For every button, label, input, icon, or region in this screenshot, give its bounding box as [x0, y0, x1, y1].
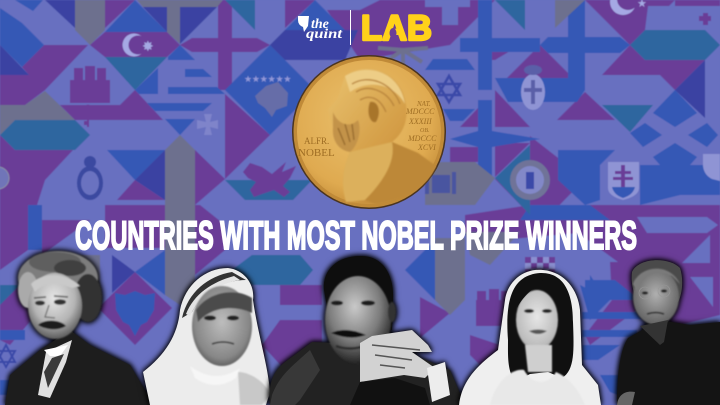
flag shapes: slate grey	[0, 0, 585, 315]
icon: Kosovo map and stars: ★★★★★★	[244, 75, 291, 85]
medal: inscription right: MDCCC	[405, 107, 435, 116]
stripes: Greek flag lower	[582, 280, 642, 395]
portrait: Malala Yousafzai	[459, 270, 601, 405]
periwinkle panels upper right	[425, 0, 718, 307]
medal: inscription right: XXXIII	[408, 117, 432, 126]
logo: The Quint: the	[311, 17, 329, 32]
icon: Albanian eagle	[115, 291, 155, 336]
icon: crescent and star: ✸	[142, 39, 154, 55]
icon: small Star of David lower left	[0, 345, 15, 367]
flag shapes: indigo	[0, 0, 705, 293]
icon: Serbia crest	[521, 65, 545, 110]
medal: Nobel gold medal	[292, 55, 446, 209]
icon: Croatian checker	[525, 257, 555, 275]
portrait: Albert Einstein	[5, 251, 150, 405]
icon: small purple cross	[699, 13, 711, 25]
icon: Kosovo map and stars	[244, 75, 291, 117]
portrait: Kazuo Ishiguro	[617, 260, 720, 405]
icon: Slovakia shield	[608, 162, 639, 200]
icon: Turkey crescent	[610, 0, 647, 15]
logo: LAB: LAB	[361, 9, 432, 48]
medal: Alfred Nobel relief	[328, 69, 436, 204]
medal: inscription right: XCVI	[417, 143, 436, 152]
icon: San Marino crest	[77, 156, 103, 200]
icon: Slovenia shield	[703, 154, 720, 181]
logo: The Quint	[298, 10, 351, 45]
icon: Georgia crosses	[293, 290, 305, 339]
portrait: Martin Luther King Jr.	[270, 256, 462, 405]
medal: inscription left: ALFR.	[304, 136, 329, 146]
icon: Welsh dragon	[243, 162, 296, 197]
medal: inscription left	[298, 136, 335, 159]
medal: inscription right: NAT.	[416, 100, 431, 108]
icon: second Gibraltar castle	[476, 289, 510, 326]
portrait: MLK hands and cuff	[350, 330, 450, 405]
medal: inscription right	[405, 100, 437, 152]
logo: The Quint: quint	[306, 27, 343, 42]
medal: inscription right: OB.	[420, 128, 430, 134]
icon: Malta cross	[197, 114, 218, 135]
flag shapes: teal	[0, 0, 720, 305]
icon: globe lower left edge	[0, 167, 9, 189]
Philippines-style grey rays	[378, 48, 428, 65]
medal: inscription right: MDCCC	[407, 134, 437, 143]
icon: crescent and star	[122, 34, 154, 56]
portrait: Mother Teresa	[143, 268, 270, 405]
icon: Gibraltar castle with key	[70, 66, 110, 127]
icon: Portugal crest	[510, 160, 550, 200]
icon: Spain crest	[425, 172, 456, 194]
lower half purple	[42, 220, 90, 255]
icon: Star of David	[438, 76, 460, 102]
medal: inscription left: NOBEL	[298, 147, 335, 159]
